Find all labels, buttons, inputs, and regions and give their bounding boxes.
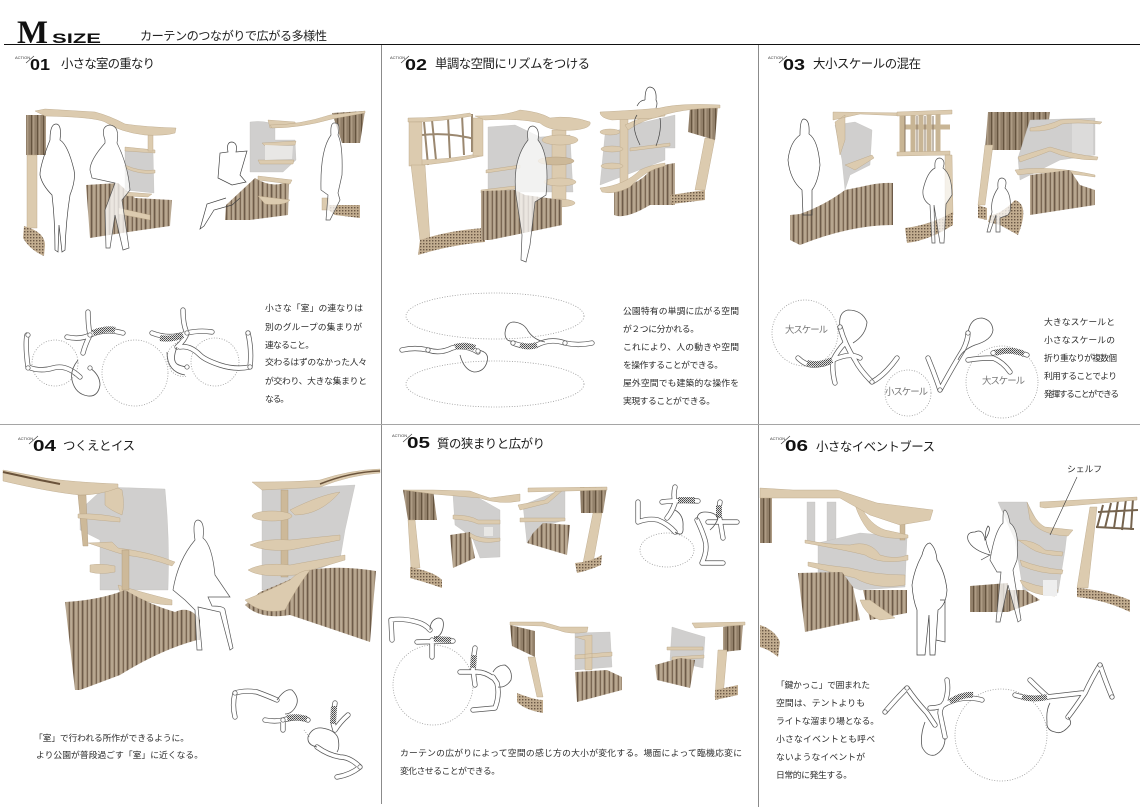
reader outline	[200, 142, 247, 229]
body text 01: 連なること。	[265, 339, 314, 350]
heading 04: 04	[33, 438, 56, 455]
body text 01: が交わり、大きな集まりと	[265, 375, 367, 386]
seated figure	[173, 520, 233, 650]
body text 02: 屋外空間でも建築的な操作を	[623, 377, 739, 388]
body text 03: 折り重なりが複数個	[1044, 352, 1117, 363]
plan diagram 04	[233, 690, 362, 777]
figure outline	[40, 124, 74, 252]
page title	[4, 15, 1140, 51]
heading 04: つくえとイス	[63, 439, 135, 453]
heading 02: 単調な空間にリズムをつける	[435, 56, 590, 71]
heading 01: 小さな室の重なり	[61, 57, 155, 71]
model C: open span	[510, 622, 622, 713]
figure with white fill	[90, 125, 130, 250]
panel: 05 narrow and wide	[391, 433, 745, 776]
plan diagram A+B with dotted ellipse	[638, 487, 737, 567]
panel: 04 desk and chair	[3, 436, 380, 777]
heading 06	[770, 436, 935, 455]
body text 03	[1044, 316, 1119, 399]
heading 05: 05	[407, 435, 430, 452]
heading 02	[390, 55, 590, 74]
page title: カーテンのつながりで広がる多様性	[140, 28, 327, 43]
heading 01	[15, 55, 155, 74]
model D: small stack	[655, 622, 745, 700]
body text 01: 小さな「室」の連なりは	[265, 302, 363, 313]
page title: SIZE	[52, 30, 101, 46]
body text 06: ライトな溜まり場となる。	[776, 715, 879, 726]
body text 05	[400, 747, 742, 776]
body text 04	[34, 732, 203, 760]
heading 06: 06	[785, 438, 808, 455]
plan diagram 06	[883, 663, 1114, 781]
figure with fill	[923, 158, 952, 243]
heading 01: 01	[30, 57, 50, 74]
body text 02: が２つに分かれる。	[623, 323, 699, 334]
plan diagram 02	[402, 293, 592, 407]
model: right view	[978, 112, 1102, 235]
model: right view	[600, 87, 720, 216]
heading 03: ACTION	[768, 55, 783, 60]
body text 05: カーテンの広がりによって空間の感じ方の大小が変化する。場面によって臨機応変に	[400, 747, 742, 758]
heading 01: ACTION	[15, 55, 30, 60]
model: booth left view	[760, 488, 947, 657]
heading 03: 03	[783, 57, 805, 74]
body text 06: 「鍵かっこ」で囲まれた	[776, 679, 870, 690]
body text 03: 発揮することができる	[1044, 388, 1119, 399]
body text 01: 別のグループの集まりが	[265, 321, 362, 332]
heading 04	[18, 436, 135, 455]
body text 06: 日常的に発生する。	[776, 769, 852, 780]
figure with plant	[990, 510, 1021, 622]
model: spiral shelf view	[245, 469, 380, 642]
body text 02: 実現することができる。	[623, 395, 715, 406]
model: left view	[408, 110, 590, 262]
heading 05	[392, 433, 545, 452]
body text 06: 小さなイベントとも呼べ	[776, 734, 875, 744]
shelf callout: シェルフ	[1067, 464, 1102, 474]
body text 02: を操作することができる。	[623, 359, 723, 370]
body text 05: 変化させることができる。	[400, 765, 500, 776]
panel: 06 small event booth	[760, 436, 1138, 781]
icon: plant outline	[968, 526, 990, 560]
body text 02	[623, 305, 739, 406]
body text 02: 公園特有の単調に広がる空間	[623, 305, 739, 316]
scale labels: 大スケール	[982, 375, 1025, 386]
plan diagram C+D with dotted circle	[391, 618, 511, 725]
figure behind	[634, 87, 660, 146]
figure outline	[788, 119, 820, 215]
standing figure outline	[321, 123, 342, 220]
body text 01: 交わるはずのなかった人々	[265, 357, 367, 367]
plan diagram 01	[26, 310, 252, 406]
body text 04: 「室」で行われる所作ができるように。	[34, 732, 189, 743]
plan diagram 03	[772, 300, 1038, 418]
heading 05: ACTION	[392, 433, 407, 438]
child figure	[987, 178, 1010, 232]
heading 03	[768, 55, 921, 74]
model: booth right view	[968, 497, 1138, 622]
body text 03: 大きなスケールと	[1044, 316, 1115, 327]
heading 02: ACTION	[390, 55, 405, 60]
body text 06: 空間は、テントよりも	[776, 698, 865, 708]
heading 06: ACTION	[770, 436, 785, 441]
heading 05: 質の狭まりと広がり	[437, 436, 545, 451]
scale labels	[785, 324, 1025, 397]
heading 06: 小さなイベントブース	[816, 439, 935, 454]
heading 04: ACTION	[18, 436, 33, 441]
heading 02: 02	[405, 57, 427, 74]
heading 03: 大小スケールの混在	[813, 56, 921, 71]
body text 04: より公園が普段過ごす「室」に近くなる。	[36, 749, 203, 760]
figure	[515, 126, 547, 262]
body text 01: なる。	[265, 394, 289, 404]
model A: wide span	[403, 490, 520, 588]
panel: 03 mixed scale	[768, 55, 1119, 418]
figure with bag	[912, 543, 947, 655]
scale labels: 小スケール	[885, 386, 928, 397]
model: right view with reader and standing figure	[200, 111, 365, 229]
panel: 01 small rooms overlap	[15, 55, 367, 406]
model: left view with two figures	[23, 109, 176, 256]
model: left view	[788, 110, 953, 245]
scale labels: 大スケール	[785, 324, 828, 335]
body text 01	[265, 302, 367, 404]
model B: right half	[518, 487, 607, 573]
model: desk view	[3, 470, 233, 690]
body text 03: 利用することでより	[1044, 370, 1117, 381]
body text 06: ないようなイベントが	[776, 751, 865, 762]
page title: M	[17, 15, 48, 51]
body text 02: これにより、人の動きや空間	[623, 342, 739, 352]
shelf callout	[1050, 464, 1102, 535]
panel: 02 rhythm in flat space	[390, 55, 739, 407]
body text 06	[776, 679, 879, 780]
body text 03: 小さなスケールの	[1044, 335, 1115, 345]
